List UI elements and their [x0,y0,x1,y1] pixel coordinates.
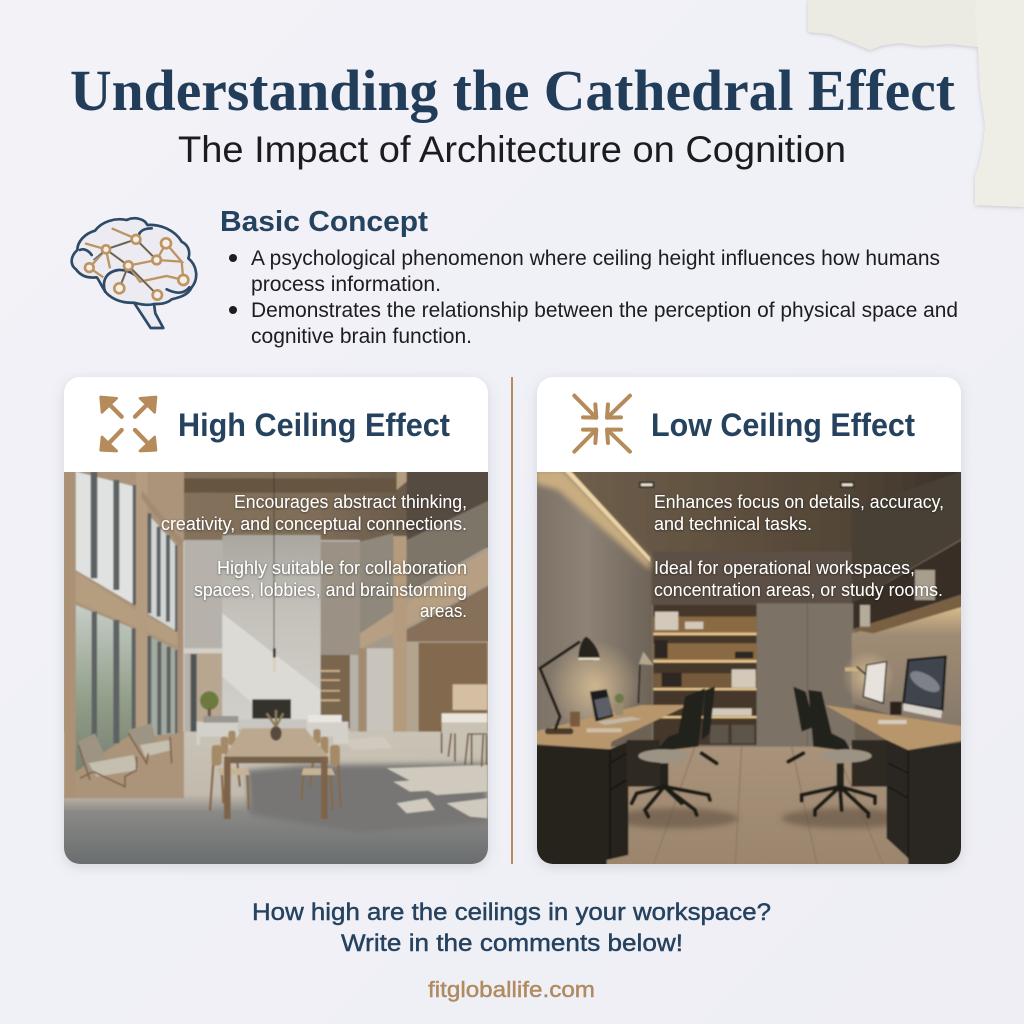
panel: high ceiling effect [60,377,490,870]
text block: low ceiling description: Ideal for operational workspaces, [654,557,915,578]
sofas [197,722,348,745]
chairs [655,687,852,787]
text block: high ceiling description: Highly suitable for collaboration [217,557,467,578]
panel: low ceiling effect [535,377,965,870]
photo: high-ceiling interior [60,470,490,870]
fireplace + plant [252,699,291,719]
floor [606,746,910,864]
recessed lights [640,483,854,487]
divider [511,377,513,864]
photo: low-ceiling workspace [535,470,965,870]
text block: low ceiling description: and technical tasks. [654,513,812,534]
back wall [652,605,855,746]
bullet list: basic concept: cognitive brain function. [251,325,472,348]
icon: brain network [72,218,196,328]
text block: high ceiling description: creativity, and conceptual connections. [161,513,467,534]
torn paper decoration [808,0,1024,207]
website: fitgloballife.com [428,977,595,1002]
icon: expanding arrows [101,397,156,451]
panel card: low ceiling [537,377,961,864]
text block: low ceiling description: Enhances focus on details, accuracy, [654,491,944,512]
bullet list: basic concept: Demonstrates the relationship between the perception of physical space and [251,299,958,322]
right desk [852,740,888,787]
call to action [252,899,771,957]
left desk [535,742,628,870]
text block: high ceiling description: spaces, lobbies, and brainstorming [194,579,467,600]
stools [440,728,487,767]
text block: low ceiling description [654,491,944,600]
text block: low ceiling description: concentration areas, or study rooms. [654,579,943,600]
table [225,728,328,757]
armchairs [78,723,157,773]
call to action: Write in the comments below! [341,930,683,957]
heading: high ceiling effect: High Ceiling Effect [178,407,450,443]
dining chairs [210,753,341,811]
right desk items [845,667,858,671]
right wall [851,606,961,726]
heading: low ceiling effect: Low Ceiling Effect [651,407,915,443]
bullet list: basic concept [229,247,958,348]
vase [270,726,282,741]
bookshelf [653,605,757,745]
windows left [64,470,184,798]
panel card: high ceiling [64,377,488,864]
title: Understanding the Cathedral Effect [70,58,956,123]
bullet list: basic concept: A psychological phenomenon where ceiling height influences how humans [251,247,940,270]
icon: compressing arrows [574,396,630,452]
call to action: How high are the ceilings in your workspace? [252,899,771,926]
text block: high ceiling description [161,491,467,621]
heading: basic concept: Basic Concept [220,206,428,238]
bullet list: basic concept: process information. [251,273,441,296]
left desk items [545,728,573,734]
text block: high ceiling description: Encourages abstract thinking, [234,491,467,512]
pendant [273,472,275,648]
floor [60,732,490,870]
text block: high ceiling description: areas. [420,600,467,621]
left wall [537,482,643,731]
subtitle: The Impact of Architecture on Cognition [178,129,846,170]
